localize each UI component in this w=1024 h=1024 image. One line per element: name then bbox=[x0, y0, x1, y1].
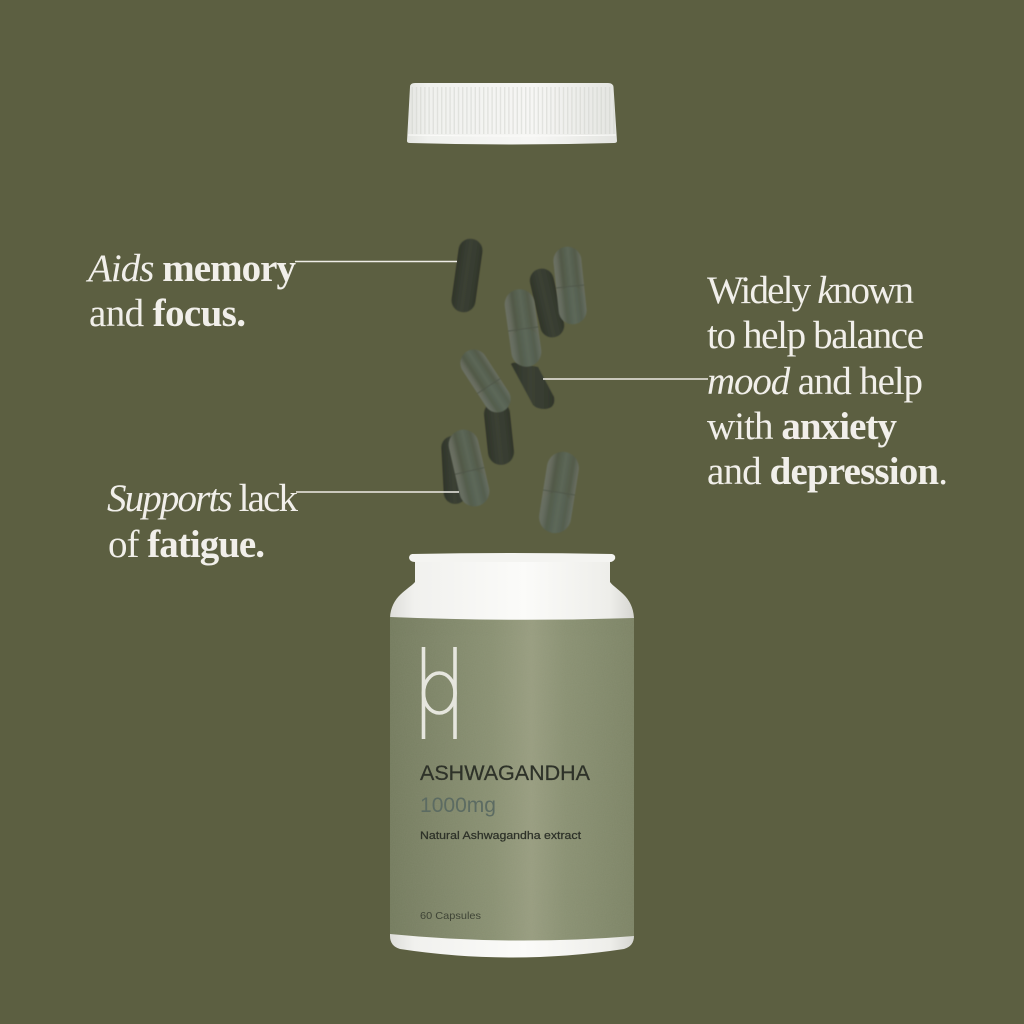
capsule: dark tapered centre bbox=[511, 363, 554, 409]
callout line: fatigue bbox=[296, 491, 459, 493]
callout line: mood bbox=[543, 378, 708, 380]
callout text: mood, anxiety and depression: and depression. bbox=[707, 450, 948, 493]
callout text: memory and focus: Aids memory bbox=[85, 247, 296, 290]
callout text: mood, anxiety and depression: to help balance bbox=[707, 314, 924, 357]
callout text: fatigue: of fatigue. bbox=[108, 523, 265, 566]
callout text: mood, anxiety and depression: with anxiety bbox=[707, 405, 898, 448]
bottle cap bbox=[407, 83, 617, 144]
dosage: 1000mg bbox=[420, 794, 496, 817]
callout text: memory and focus bbox=[85, 247, 296, 335]
callout line: memory bbox=[295, 260, 457, 262]
bottle bbox=[390, 553, 635, 958]
capsule: dark lower centre bbox=[483, 400, 515, 466]
callout text: mood, anxiety and depression: Widely known bbox=[707, 269, 914, 312]
capsule: light centre bbox=[503, 287, 543, 369]
description: Natural Ashwagandha extract bbox=[420, 830, 581, 842]
bottle rim bbox=[409, 553, 615, 562]
capsule count: 60 Capsules bbox=[420, 910, 481, 922]
callout text: mood, anxiety and depression: mood and help bbox=[707, 360, 923, 403]
bottle body bbox=[390, 560, 634, 958]
capsule: light lower right bbox=[537, 450, 581, 535]
capsule: light tilted bbox=[455, 344, 516, 418]
callout text: fatigue: Supports lack bbox=[107, 477, 298, 520]
callout text: mood, anxiety and depression bbox=[707, 269, 948, 493]
bottle label bbox=[390, 617, 635, 947]
logo bbox=[424, 647, 455, 739]
capsule: light lower left bbox=[446, 427, 492, 509]
callout text: fatigue bbox=[107, 477, 298, 566]
capsule: dark upper left bbox=[450, 237, 484, 314]
capsule: light upper right bbox=[552, 245, 588, 326]
capsule: dark upper right bbox=[527, 266, 567, 340]
callout text: memory and focus: and focus. bbox=[89, 292, 246, 335]
product name: ASHWAGANDHA bbox=[420, 762, 590, 785]
capsule: dark lower left bbox=[441, 435, 467, 505]
